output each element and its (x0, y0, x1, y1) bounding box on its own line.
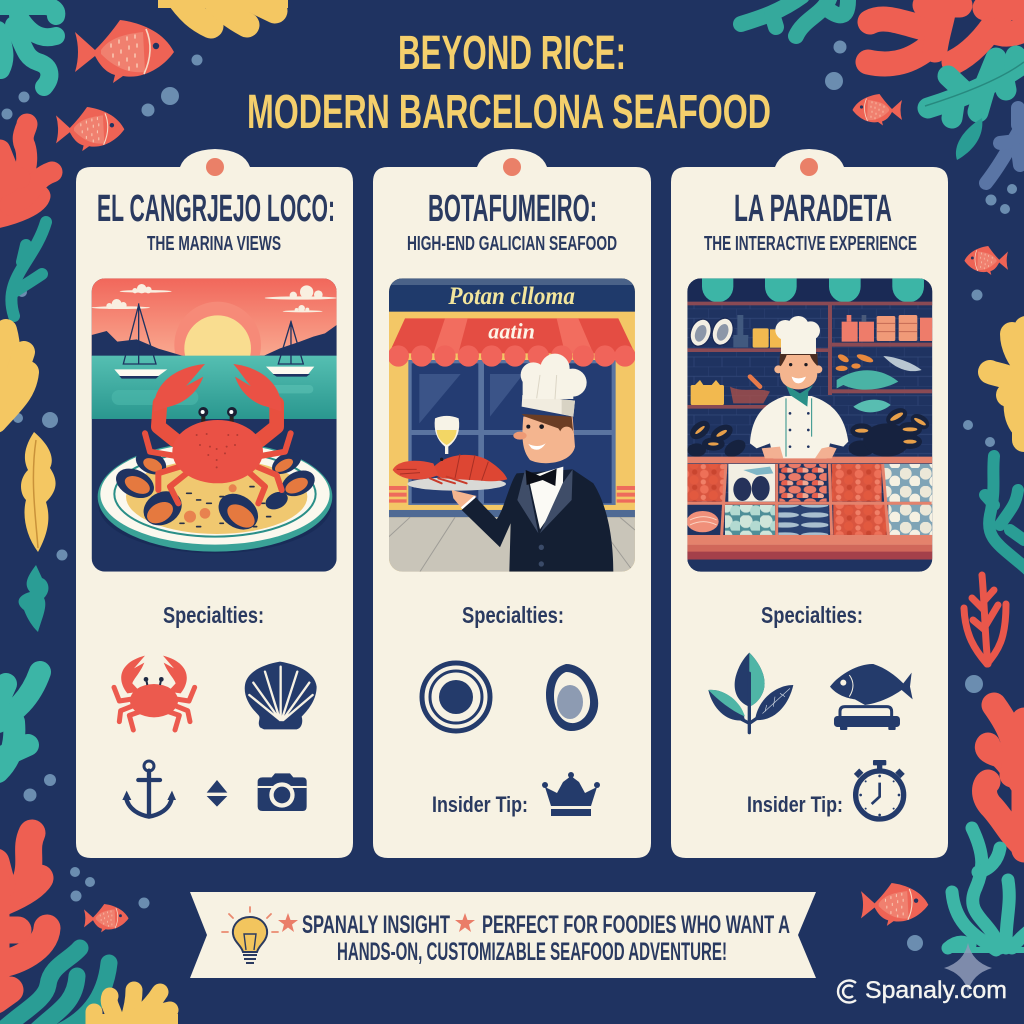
card background (373, 149, 651, 858)
coral: bottom yellow (86, 990, 178, 1024)
card background (671, 149, 948, 858)
icon: anchor (122, 761, 176, 817)
star icon (278, 913, 298, 932)
icon: leaves (708, 653, 793, 733)
fish: right small (964, 246, 1008, 275)
tab dot (800, 158, 818, 176)
icon: sort diamond (207, 780, 227, 807)
insight text: HANDS-ON, CUSTOMIZABLE SEAFOOD ADVENTURE! (337, 938, 727, 966)
illustration: crab on paella at marina (91, 278, 337, 572)
tab dot (503, 158, 521, 176)
title (247, 27, 771, 139)
subheading: THE INTERACTIVE EXPERIENCE (704, 233, 917, 255)
fish: top right (852, 94, 902, 126)
coral: right dark blue (986, 108, 1024, 183)
coral: left red (0, 124, 52, 218)
seaweed: small teal leaf (19, 565, 48, 632)
panel: La Paradeta (671, 149, 948, 858)
tab dot (206, 158, 224, 176)
card background (76, 149, 353, 858)
coral: right yellow (990, 328, 1024, 440)
coral: left teal large (0, 672, 40, 772)
heading: BOTAFUMEIRO: (428, 188, 597, 230)
icon: crown (542, 772, 600, 816)
seaweed: right small teal (956, 118, 982, 160)
insight text: SPANALY INSIGHT (302, 911, 450, 939)
ribbon shape (190, 892, 816, 978)
icon: fish on scale (830, 664, 913, 730)
icon: light bulb (222, 907, 278, 963)
subheading: HIGH-END GALICIAN SEAFOOD (407, 233, 617, 255)
specialties label: Specialties: (761, 602, 863, 628)
coral: left yellow (0, 330, 28, 422)
coral: top right teal (741, 0, 848, 36)
title: BEYOND RICE: (398, 27, 626, 80)
fish: bottom left small (84, 904, 129, 932)
panel: Botafumeiro (373, 149, 651, 858)
insider tip label: Insider Tip: (432, 792, 528, 817)
illustration: waiter with lobster at restaurant (388, 278, 636, 572)
seaweed: yellow leaf (21, 432, 56, 552)
illustration: waiter with lobster at restaurant: aatin (488, 318, 535, 343)
icon: scallop shell (245, 662, 317, 729)
icon: oyster (546, 664, 598, 731)
fish: bottom right (861, 883, 928, 926)
heading: EL CANGRJEJO LOCO: (97, 188, 335, 230)
coral: right teal (985, 456, 1024, 570)
coral: right thin red (964, 575, 1006, 664)
icon: stopwatch (856, 760, 904, 819)
heading: LA PARADETA (734, 188, 892, 230)
coral: right red large (984, 705, 1024, 850)
watermark: Spanaly.com (865, 977, 1007, 1004)
coral: bottom left teal (0, 948, 109, 1024)
icon: camera (258, 773, 307, 811)
insight text (302, 911, 790, 966)
illustration: waiter with lobster at restaurant: Potan clloma (447, 282, 575, 310)
sparkle (944, 943, 992, 992)
coral: top left teal (0, 6, 56, 87)
specialties label: Specialties: (163, 602, 264, 628)
subheading: THE MARINA VIEWS (147, 233, 281, 255)
panel: El Cangrejo Loco (76, 149, 353, 858)
coral: top yellow (158, 0, 288, 26)
title: MODERN BARCELONA SEAFOOD (247, 86, 771, 139)
callout banner (190, 892, 816, 978)
insight text: PERFECT FOR FOODIES WHO WANT A (482, 911, 790, 939)
seaweed: right teal leaf (925, 56, 1024, 118)
coral: bottom left red (0, 833, 47, 1000)
insider tip label: Insider Tip: (747, 792, 843, 817)
coral: bottom right teal (948, 828, 1024, 950)
fish: top large (75, 20, 174, 83)
illustration: fish market with chef (686, 278, 932, 573)
star icon (455, 913, 475, 932)
fish: left second (56, 107, 124, 151)
icon: crab (114, 656, 195, 730)
specialties label: Specialties: (462, 602, 564, 628)
icon: plate rings (422, 663, 490, 731)
coral: top right red (868, 0, 1024, 64)
coral: left teal thin (11, 222, 46, 316)
